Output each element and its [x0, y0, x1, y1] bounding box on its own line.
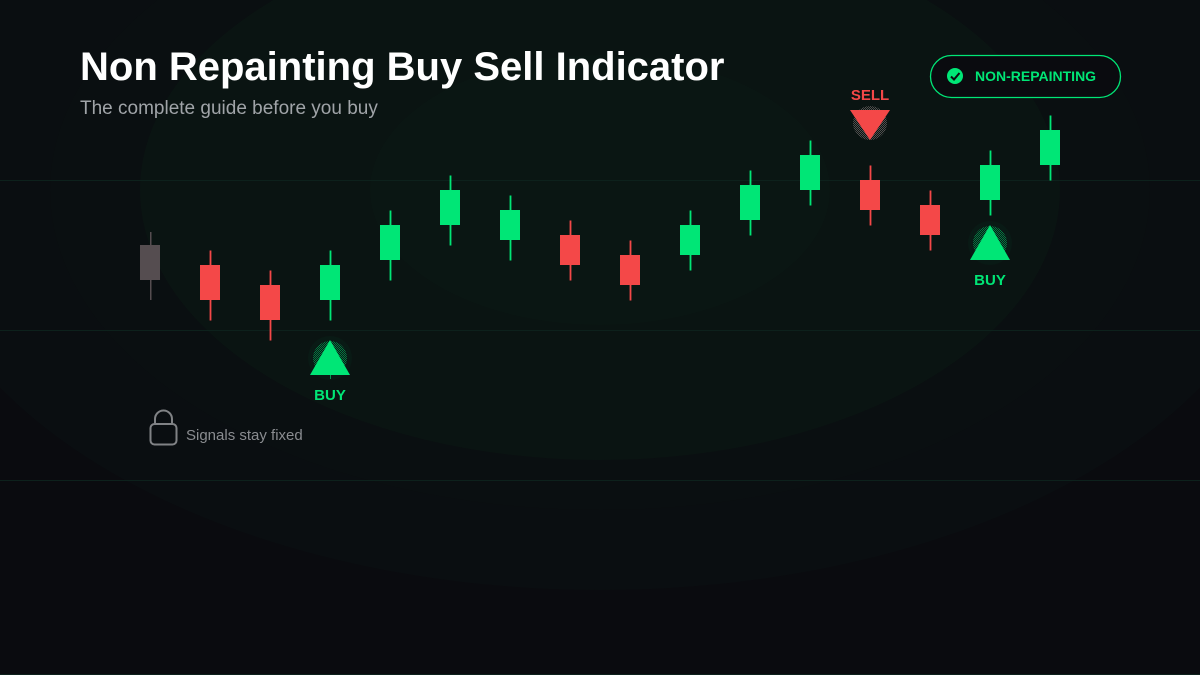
buy signal 2: BUY: [974, 272, 1006, 289]
sell signal: SELL: [851, 87, 889, 104]
red candles: [200, 166, 940, 340]
note: signals stay fixed: [150, 410, 303, 444]
title: Non Repainting Buy Sell Indicator: [80, 45, 724, 89]
buy signal 2: [968, 221, 1012, 289]
badge label: NON-REPAINTING: [975, 68, 1096, 84]
green candles: [320, 116, 1060, 320]
icon: lock: [150, 410, 176, 444]
buy signal 1: BUY: [314, 387, 346, 404]
icon: check circle: [947, 68, 963, 84]
sell signal: [850, 87, 890, 140]
candlestick chart: [140, 116, 1060, 340]
subtitle: The complete guide before you buy: [80, 98, 378, 119]
faded candle: [140, 232, 160, 300]
note text: Signals stay fixed: [186, 427, 303, 444]
badge: non-repainting: [930, 56, 1120, 98]
buy signal 1: [308, 336, 352, 404]
